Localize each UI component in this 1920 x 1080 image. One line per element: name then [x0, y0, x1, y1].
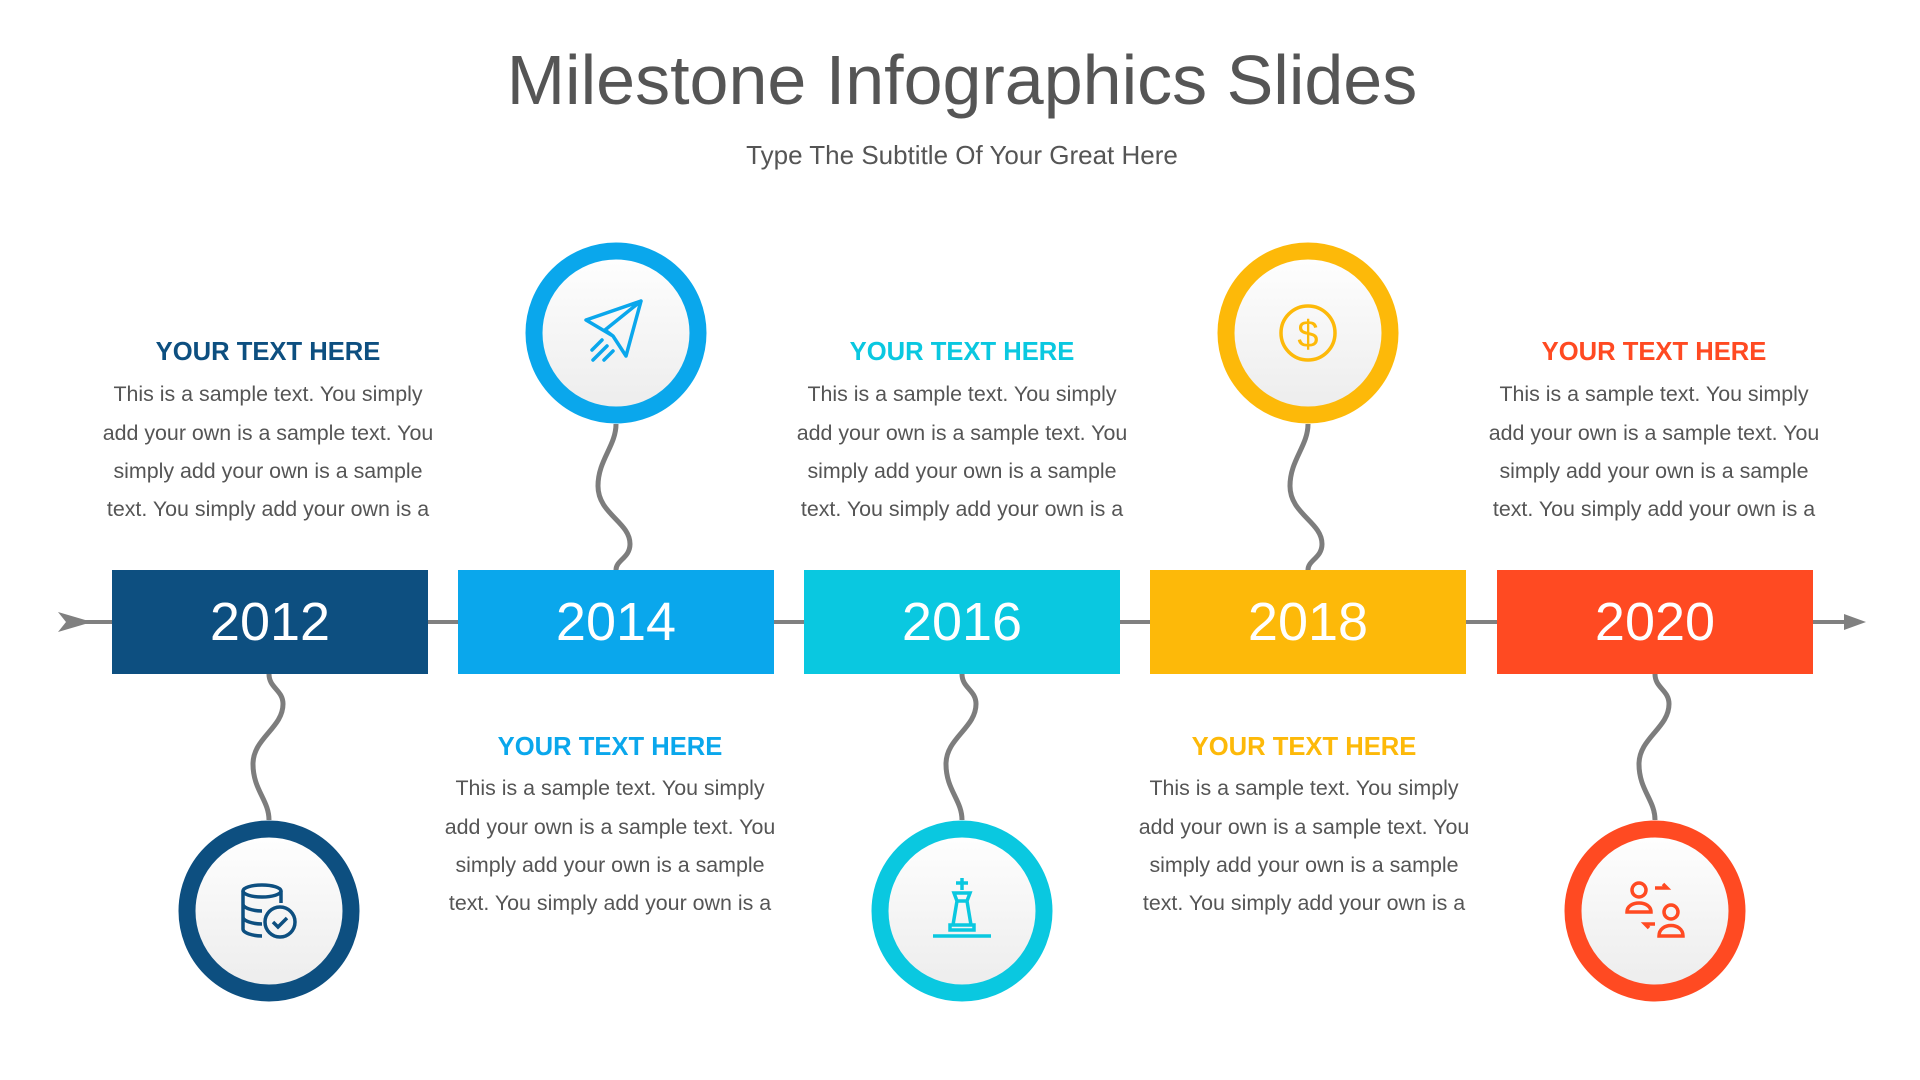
- text block 2012: simply add your own is a sample: [113, 459, 423, 483]
- text block 2012: This is a sample text. You simply: [113, 382, 423, 406]
- year box 2018: [1150, 570, 1466, 674]
- text block 2012: add your own is a sample text. You: [103, 421, 433, 445]
- text block 2016: YOUR TEXT HERE: [850, 338, 1074, 366]
- text block 2016: This is a sample text. You simply: [807, 382, 1117, 406]
- title: Milestone Infographics Slides: [507, 41, 1417, 119]
- text block 2012: YOUR TEXT HERE: [156, 338, 380, 366]
- text block 2016: simply add your own is a sample: [807, 459, 1117, 483]
- text block 2018: [1139, 733, 1469, 915]
- text block 2016: [797, 338, 1127, 521]
- year box 2012: [112, 570, 428, 674]
- text block 2020: YOUR TEXT HERE: [1542, 338, 1766, 366]
- text block 2012: [103, 338, 433, 521]
- year box 2016: [804, 570, 1120, 674]
- icon circle 2020: users exchange: [1573, 829, 1737, 993]
- text block 2018: YOUR TEXT HERE: [1192, 733, 1416, 761]
- text block 2020: add your own is a sample text. You: [1489, 421, 1819, 445]
- year box 2016: 2016: [902, 592, 1022, 652]
- text block 2016: add your own is a sample text. You: [797, 421, 1127, 445]
- text block 2014: add your own is a sample text. You: [445, 815, 775, 839]
- icon circle 2014: paper plane: [534, 251, 698, 415]
- connectors: [253, 424, 1669, 820]
- icon circle 2016: chess king: [880, 829, 1044, 993]
- year box 2018: 2018: [1248, 592, 1368, 652]
- subtitle: Type The Subtitle Of Your Great Here: [746, 140, 1178, 170]
- year box 2012: 2012: [210, 592, 330, 652]
- timeline line with arrows: [58, 612, 1866, 632]
- text block 2016: text. You simply add your own is a: [801, 497, 1123, 521]
- text block 2014: [445, 733, 775, 915]
- text block 2018: add your own is a sample text. You: [1139, 815, 1469, 839]
- year box 2020: [1497, 570, 1813, 674]
- year box 2020: 2020: [1595, 592, 1715, 652]
- text block 2020: This is a sample text. You simply: [1499, 382, 1809, 406]
- text block 2012: text. You simply add your own is a: [107, 497, 429, 521]
- text block 2020: simply add your own is a sample: [1499, 459, 1809, 483]
- text block 2014: text. You simply add your own is a: [449, 891, 771, 915]
- year box 2014: [458, 570, 774, 674]
- text block 2014: simply add your own is a sample: [455, 853, 765, 877]
- year box 2014: 2014: [556, 592, 676, 652]
- text block 2018: text. You simply add your own is a: [1143, 891, 1465, 915]
- text block 2018: simply add your own is a sample: [1149, 853, 1459, 877]
- text block 2014: This is a sample text. You simply: [455, 776, 765, 800]
- text block 2020: text. You simply add your own is a: [1493, 497, 1815, 521]
- text block 2018: This is a sample text. You simply: [1149, 776, 1459, 800]
- text block 2020: [1489, 338, 1819, 521]
- icon circle 2018: dollar coin: [1226, 251, 1390, 415]
- icon circle 2018: dollar coin: $: [1297, 314, 1319, 356]
- text block 2014: YOUR TEXT HERE: [498, 733, 722, 761]
- icon circle 2012: database check: [187, 829, 351, 993]
